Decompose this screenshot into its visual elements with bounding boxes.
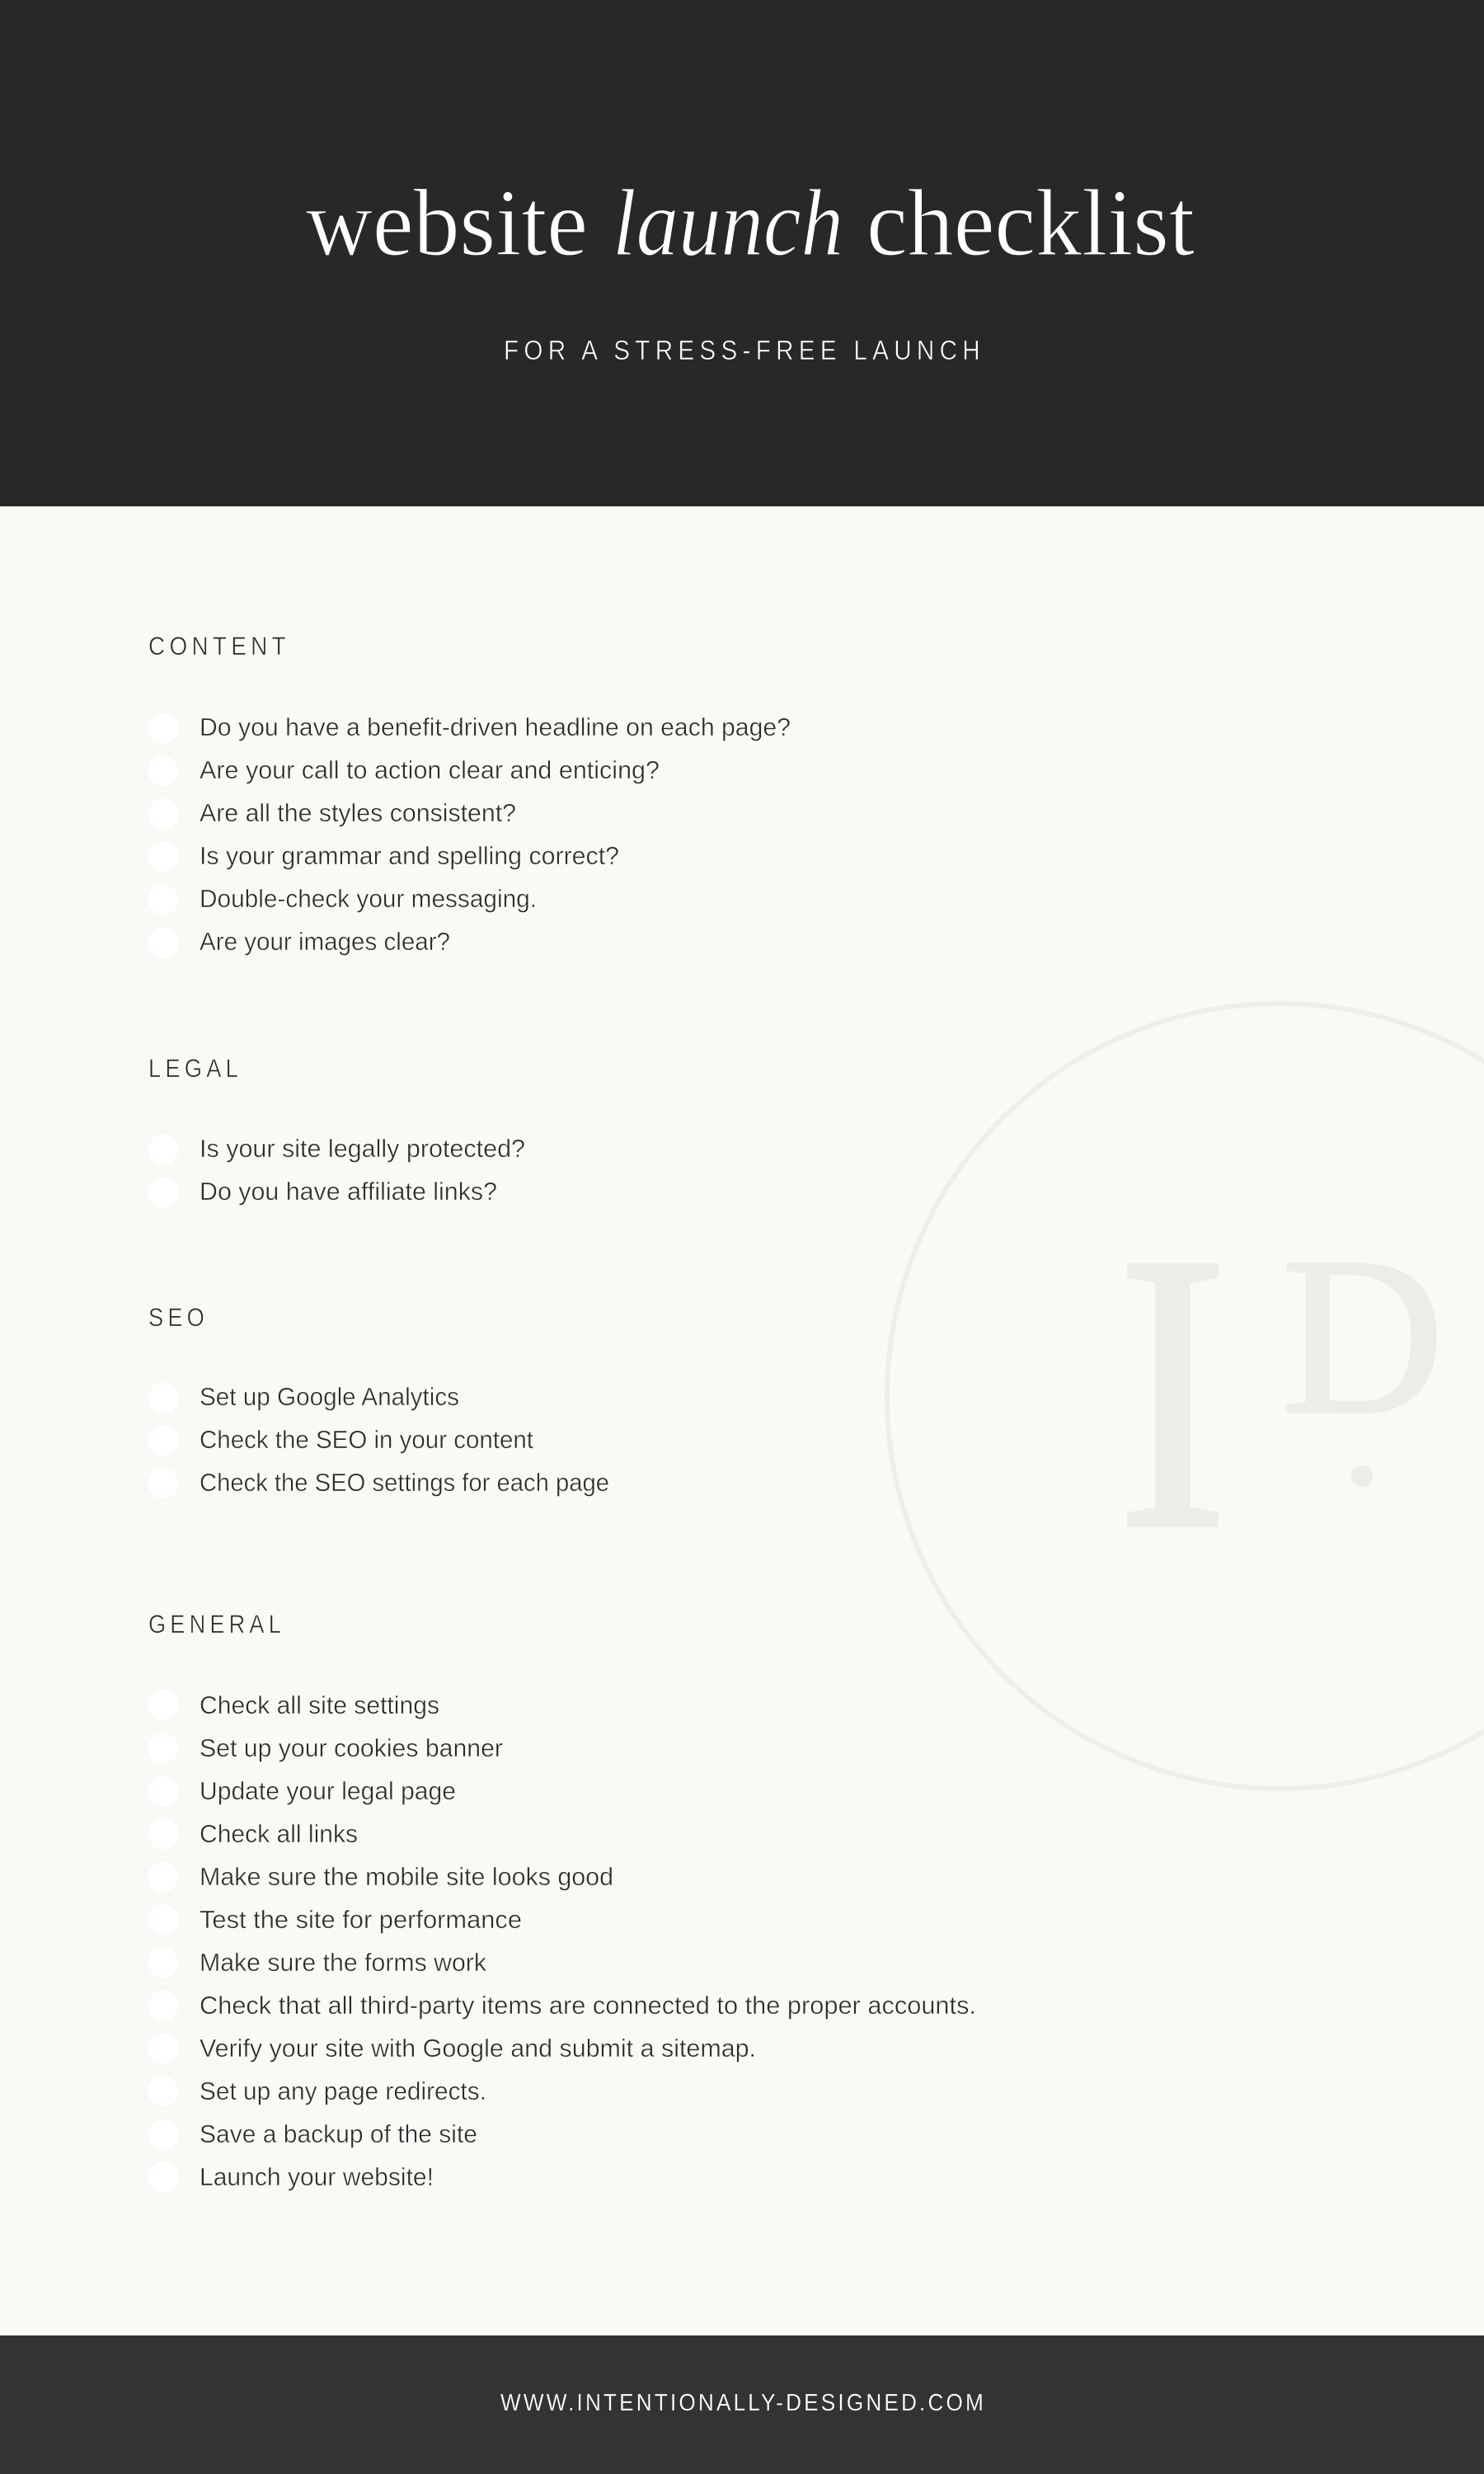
watermark logo: [887, 1004, 1484, 1789]
subtitle: FOR A STRESS-FREE LAUNCH: [504, 335, 985, 365]
heading: general: GENERAL: [148, 1609, 285, 1639]
panel: general section: [148, 1609, 976, 2192]
watermark logo: I: [1117, 1172, 1228, 1611]
checklist item: Are all the styles consistent?: [200, 799, 516, 827]
checklist item: Is your grammar and spelling correct?: [200, 842, 619, 870]
checklist item: Update your legal page: [200, 1777, 456, 1805]
footer url: WWW.INTENTIONALLY-DESIGNED.COM: [500, 2390, 986, 2416]
header band: [0, 0, 1484, 506]
heading: legal: LEGAL: [148, 1053, 242, 1083]
checklist item: Double-check your messaging.: [200, 885, 537, 913]
checklist item: [148, 1819, 358, 1849]
checklist item: Set up any page redirects.: [200, 2077, 486, 2105]
title: [306, 171, 1195, 276]
checklist item: Set up Google Analytics: [200, 1383, 459, 1411]
checklist item: Save a backup of the site: [200, 2120, 477, 2148]
checklist item: Check the SEO in your content: [200, 1426, 534, 1454]
checklist item: Check that all third-party items are connected to the proper accounts.: [200, 1992, 976, 2020]
checklist item: Check the SEO settings for each page: [200, 1469, 609, 1497]
panel: seo section: [148, 1302, 609, 1499]
title: launch: [613, 171, 843, 276]
title: checklist: [866, 171, 1195, 276]
heading: content: CONTENT: [148, 631, 290, 661]
checklist item: Are your call to action clear and enticing?: [200, 756, 660, 784]
checklist item: Check all site settings: [200, 1691, 439, 1719]
checklist item: Set up your cookies banner: [200, 1734, 503, 1762]
checklist item: Do you have a benefit-driven headline on each page?: [200, 713, 791, 741]
footer band: [0, 2335, 1484, 2474]
watermark logo: D: [1281, 1211, 1444, 1461]
heading: seo: SEO: [148, 1302, 209, 1332]
checklist item: Test the site for performance: [200, 1906, 522, 1934]
checklist item: Are your images clear?: [200, 928, 450, 956]
checklist item: Launch your website!: [200, 2163, 434, 2191]
checklist item: Do you have affiliate links?: [200, 1178, 497, 1206]
panel: content section: [148, 631, 791, 958]
checklist item: Is your site legally protected?: [200, 1135, 525, 1163]
checklist item: Make sure the mobile site looks good: [200, 1863, 613, 1891]
checklist item: Make sure the forms work: [200, 1949, 487, 1977]
checklist item: Verify your site with Google and submit a sitemap.: [200, 2034, 756, 2062]
panel: legal section: [148, 1053, 525, 1207]
checklist item: Check all links: [200, 1820, 358, 1848]
title: website: [306, 171, 588, 276]
